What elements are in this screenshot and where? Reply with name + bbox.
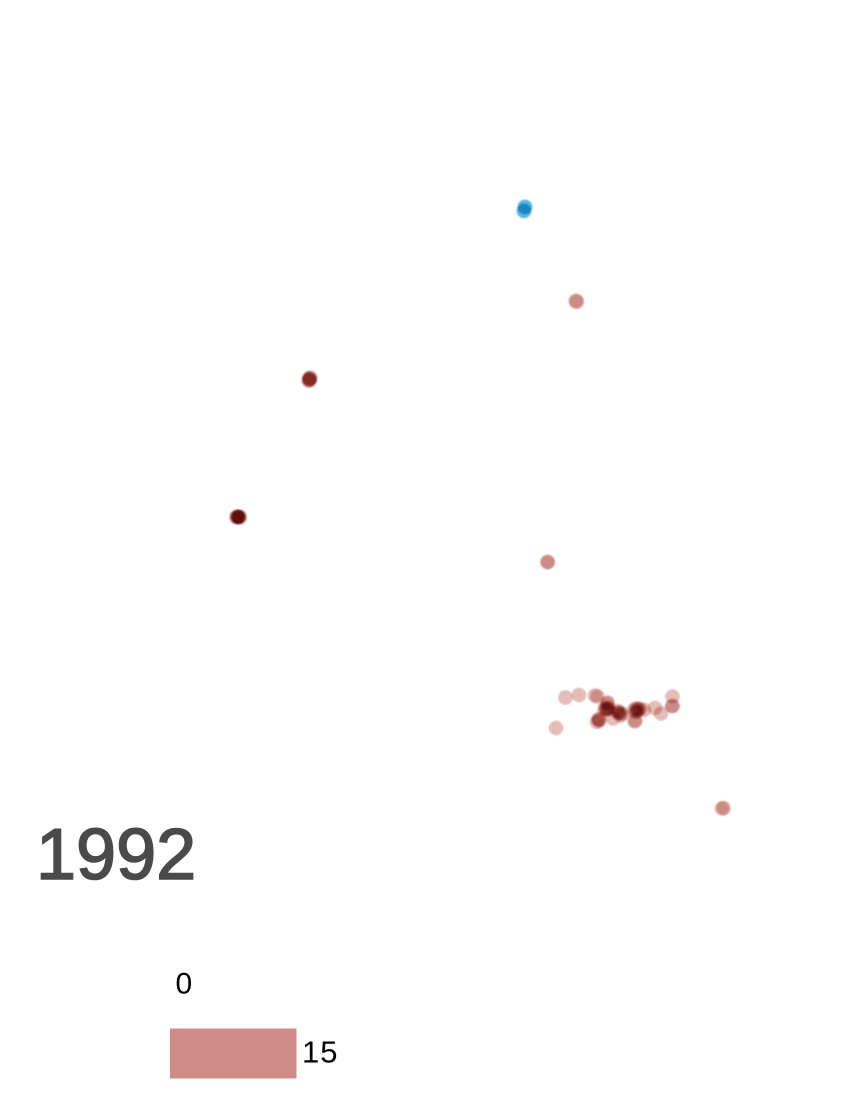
legend label: 0: 0: [176, 968, 192, 1000]
legend: [170, 968, 338, 1078]
year label: 1992: [36, 815, 196, 895]
dot cluster: south-east: [549, 688, 680, 735]
dot stack: darkest red: [229, 510, 247, 524]
legend label: 15: 15: [302, 1034, 338, 1070]
dot: upper red: [568, 294, 584, 309]
dot: central red: [540, 555, 555, 570]
dot group: blue pair: [517, 200, 532, 218]
dot stack: west red: [302, 370, 318, 388]
legend swatch: [170, 1028, 296, 1078]
dots: event locations: [229, 200, 731, 816]
dot: far south-east: [715, 801, 731, 816]
